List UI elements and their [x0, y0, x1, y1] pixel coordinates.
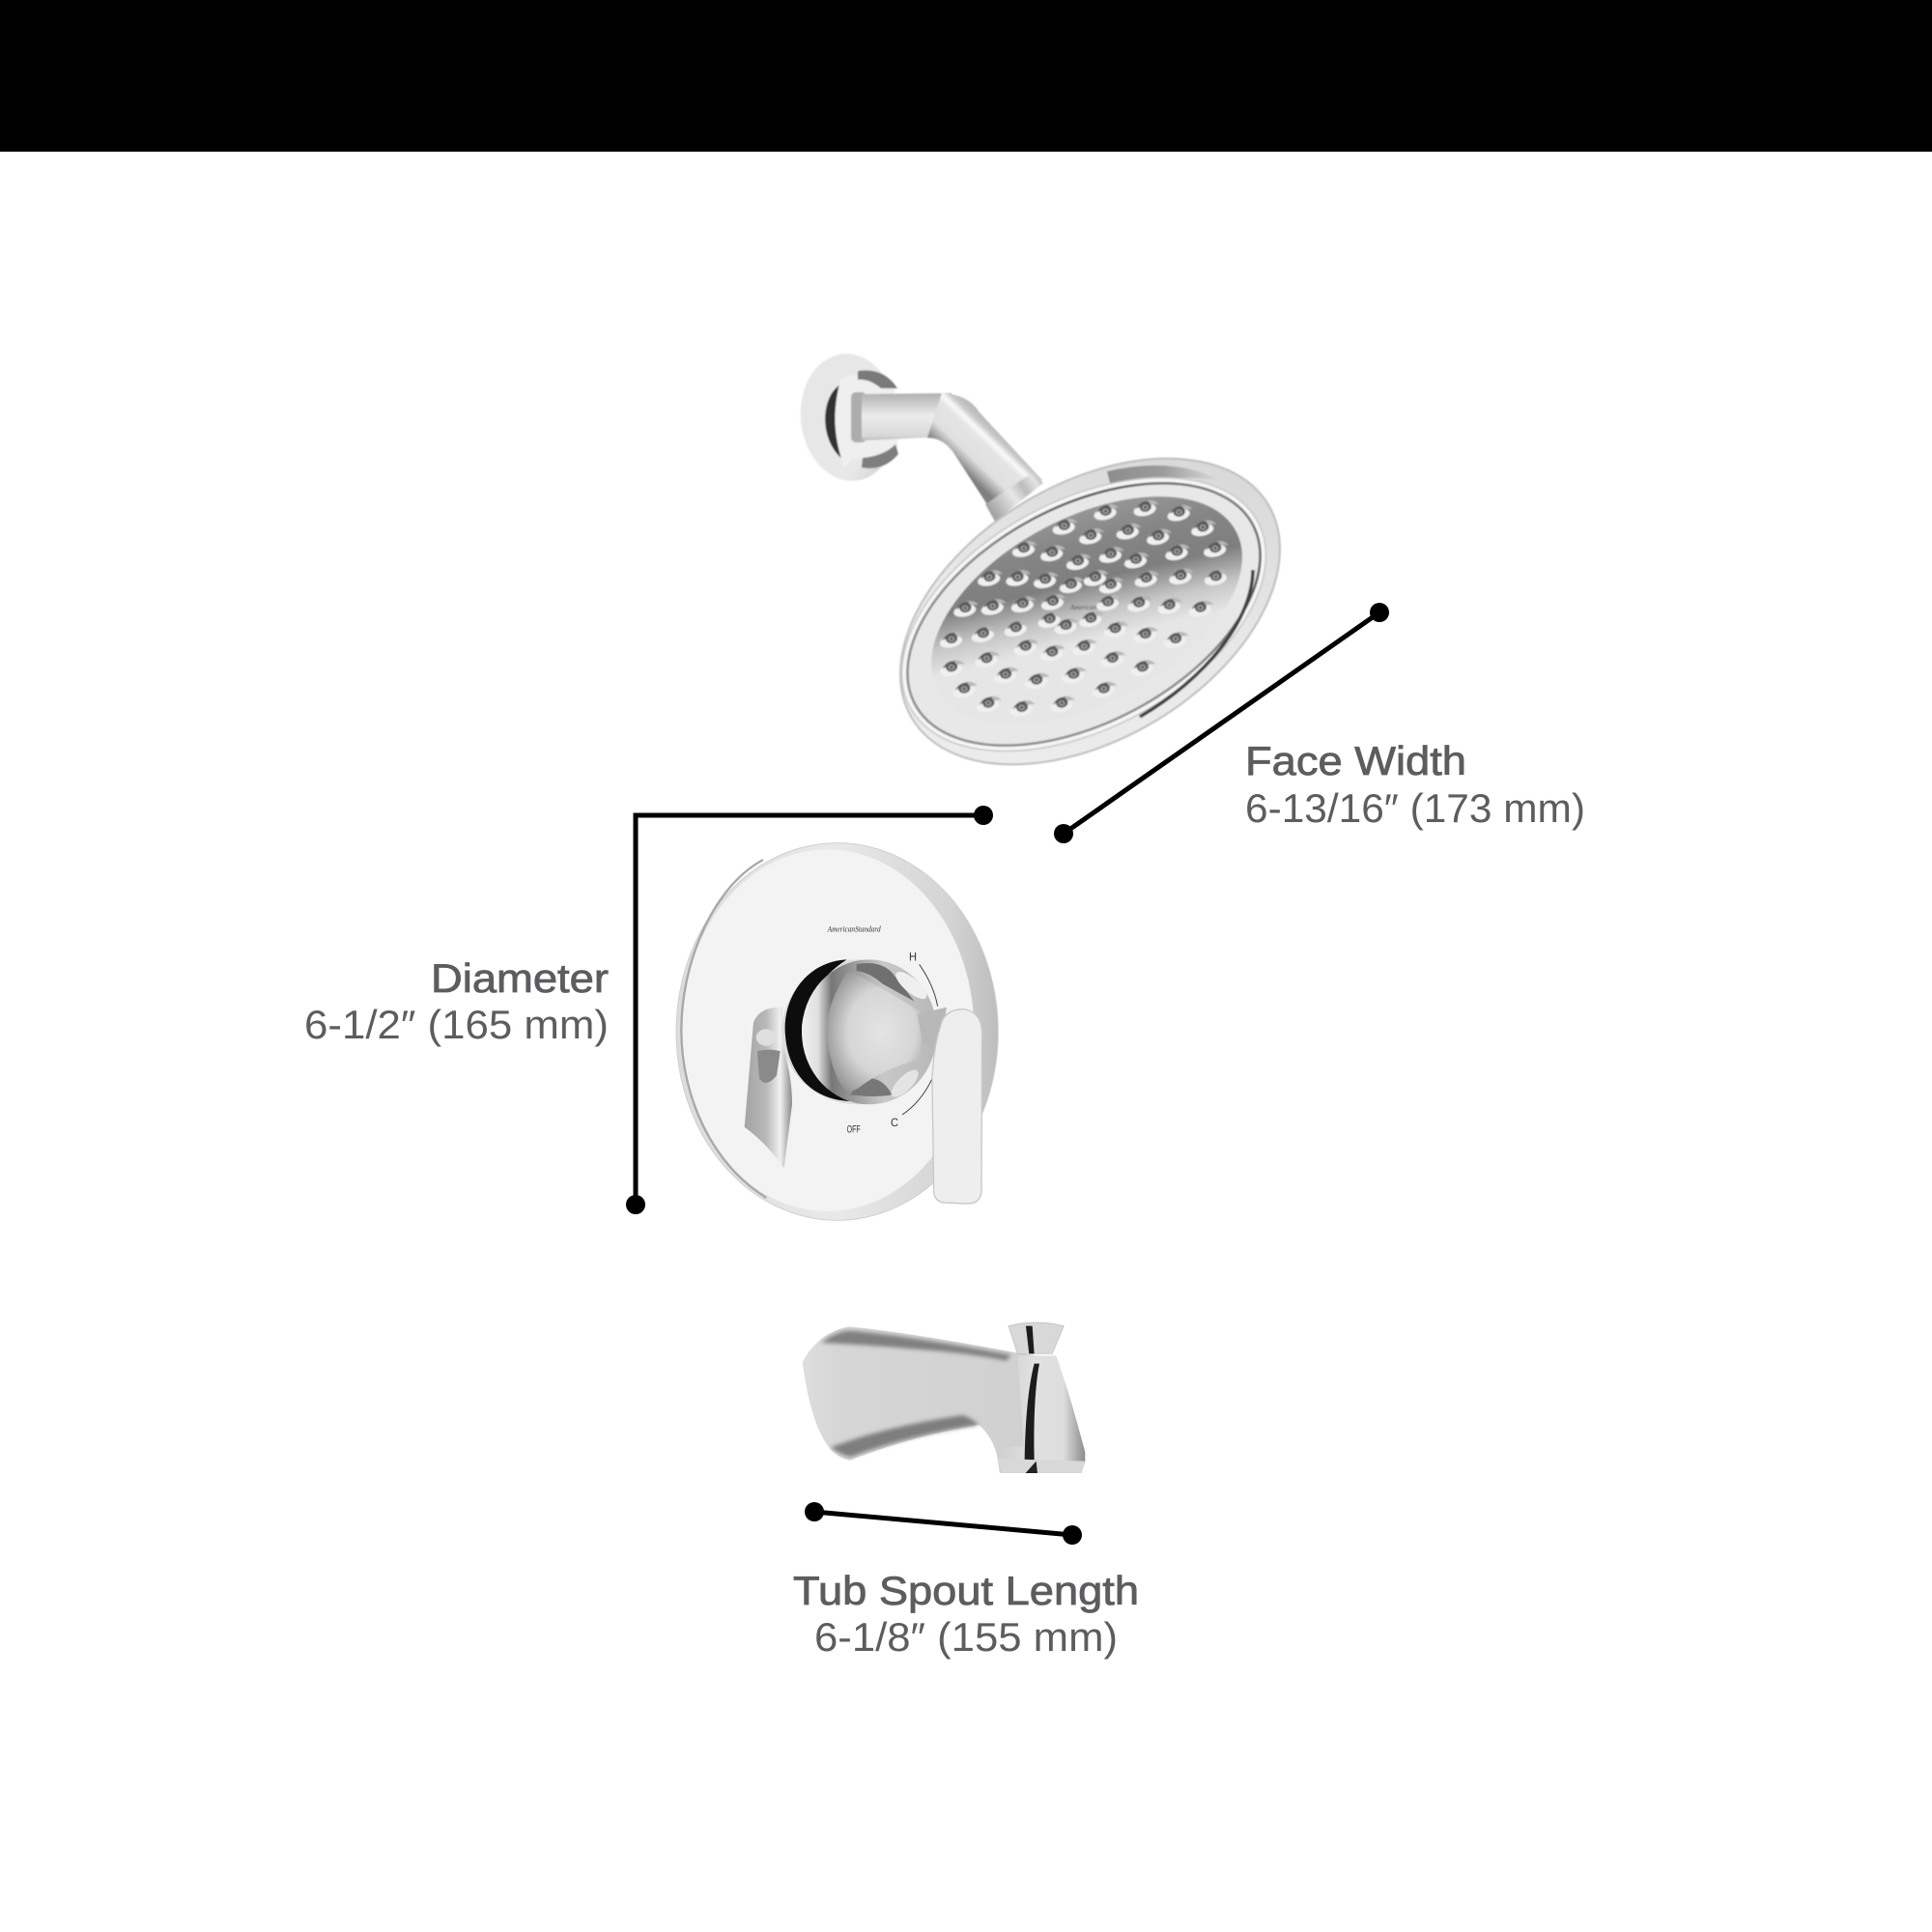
knob grip: [827, 972, 922, 1091]
diverter base ring: [998, 1459, 1085, 1473]
spout lower band: [831, 1415, 979, 1457]
diameter line: [626, 806, 993, 1214]
diameter value: 6-1/2″ (165 mm): [304, 1002, 609, 1047]
face width line: [1054, 603, 1389, 843]
spray plate: [894, 449, 1280, 772]
tub spout value: 6-1/8″ (155 mm): [814, 1614, 1118, 1660]
nozzles: [939, 500, 1229, 719]
arm collar: [985, 473, 1043, 522]
trim plate: [676, 843, 998, 1220]
shower head logo: American: [1069, 604, 1097, 611]
knob cylinder: [802, 959, 937, 1104]
spout body: [803, 1326, 1037, 1473]
diameter label: Diameter: [431, 955, 609, 1001]
diverter knob: [1009, 1322, 1064, 1353]
face chrome ring: [865, 429, 1303, 800]
temperature arc: [902, 964, 938, 1115]
left lever: [745, 1008, 792, 1168]
cold label: C: [891, 1116, 898, 1129]
handle connector: [918, 1008, 947, 1053]
tub spout line: [805, 1502, 1082, 1545]
knob highlights: [850, 963, 930, 1101]
black header band: [0, 0, 1932, 152]
knob base: [781, 959, 935, 1104]
diverter cone: [998, 1355, 1085, 1473]
spout top band: [821, 1330, 1011, 1361]
face width label: Face Width: [1245, 738, 1466, 783]
valve trim illustration: [676, 843, 998, 1220]
shower arm horizontal: [862, 393, 956, 450]
outer light ring: [856, 421, 1312, 808]
wall flange: [794, 349, 904, 486]
dimension: diameter: [304, 806, 993, 1214]
brand mark: AmericanStandard: [827, 924, 881, 933]
knob shadow: [785, 959, 850, 1101]
face width value: 6-13/16″ (173 mm): [1245, 785, 1585, 831]
shower head body: [846, 395, 1334, 828]
dimension: face width: [1054, 603, 1585, 843]
handle: [932, 1009, 982, 1204]
cone dark stripe: [1025, 1364, 1039, 1461]
lower right dark rim arc: [1140, 570, 1253, 717]
hot label: H: [909, 950, 917, 963]
tub spout label: Tub Spout Length: [793, 1568, 1139, 1613]
trim plate inner disc: [681, 849, 974, 1211]
dimension: tub spout length: [793, 1502, 1139, 1660]
body top band: [1107, 466, 1219, 487]
shower arm diagonal: [927, 393, 1042, 509]
shower head illustration: [794, 349, 1334, 828]
trim plate left edge line: [681, 860, 766, 1198]
off label: OFF: [847, 1124, 861, 1136]
tub spout illustration: [803, 1322, 1085, 1473]
